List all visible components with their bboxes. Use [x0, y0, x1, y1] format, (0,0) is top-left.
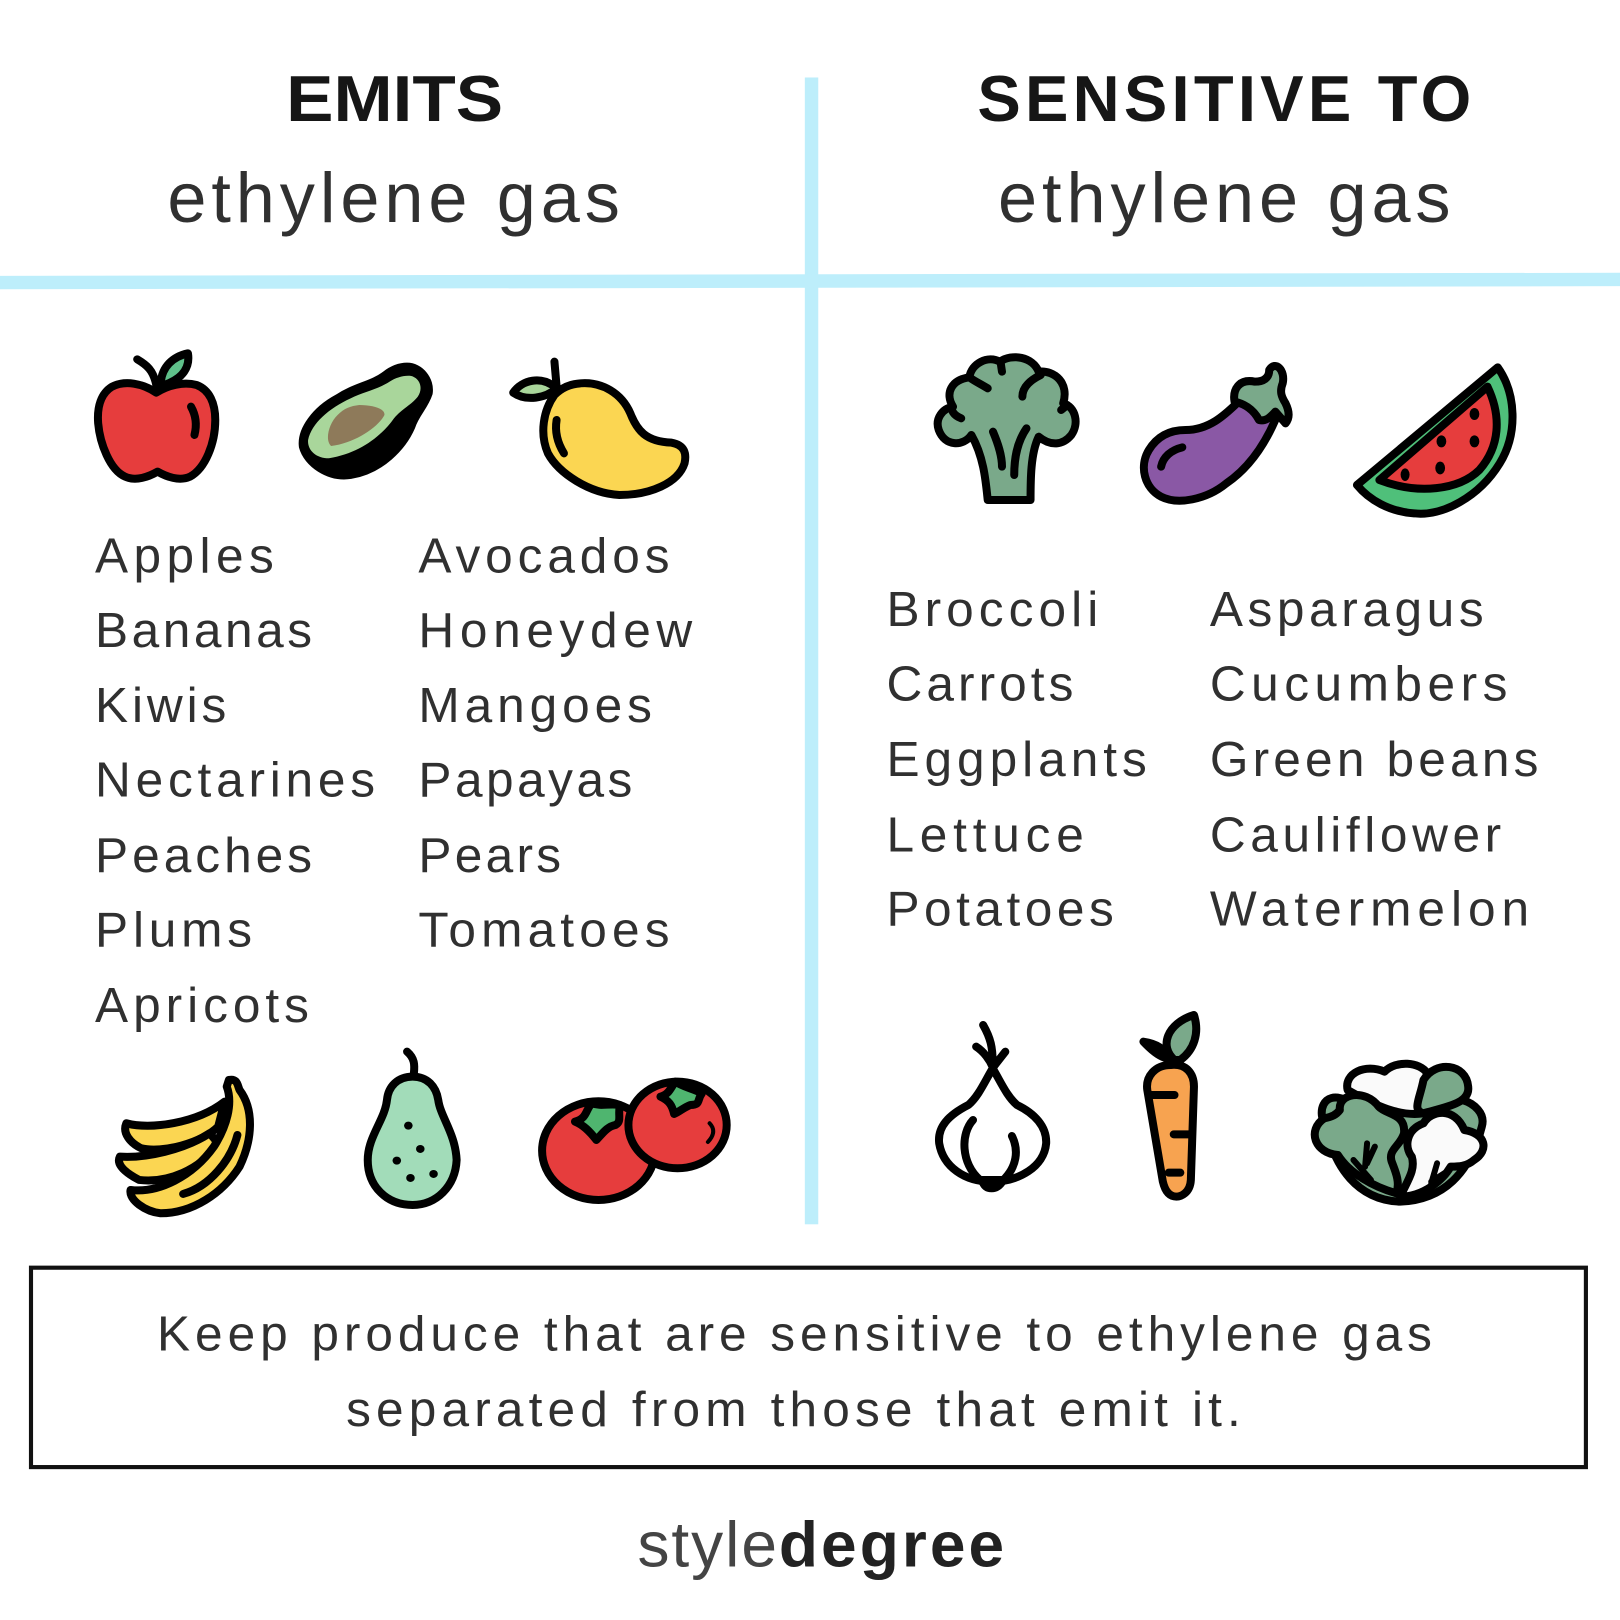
icon: apple: [98, 353, 215, 479]
icon: eggplant: [1144, 366, 1289, 501]
list: sensitive produce, second column: Green beans: [1210, 731, 1538, 787]
icon: mango: [513, 362, 685, 495]
icon: tomatoes: [542, 1082, 727, 1200]
list: emitting produce, second column: Avocados: [418, 527, 669, 583]
list: sensitive produce, first column: Eggplants: [886, 731, 1147, 787]
list: emitting produce, first column: Apricots: [95, 977, 309, 1033]
list: sensitive produce, first column: Broccoli: [886, 581, 1098, 637]
callout text: Keep produce that are sensitive to ethylene gas: [157, 1305, 1432, 1361]
list: emitting produce, first column: Plums: [95, 901, 252, 957]
list: emitting produce, second column: Papayas: [418, 752, 632, 808]
logo: styledegree: styledegree: [637, 1508, 1004, 1580]
callout box: [31, 1268, 1586, 1467]
heading: EMITS: EMITS: [286, 62, 503, 135]
subheading: ethylene gas: ethylene gas: [167, 158, 620, 237]
list: sensitive produce, first column: Potatoes: [886, 881, 1114, 937]
list: sensitive produce, first column: [886, 581, 1147, 937]
icon: watermelon: [1357, 367, 1513, 514]
list: emitting produce, second column: Tomatoes: [418, 901, 669, 957]
list: emitting produce, first column: Nectarines: [95, 752, 375, 808]
icon: cauliflower: [1315, 1064, 1484, 1202]
list: sensitive produce, first column: Carrots: [886, 655, 1073, 711]
icon: carrot: [1143, 1015, 1196, 1197]
list: emitting produce, second column: Honeydew: [418, 602, 692, 658]
list: sensitive produce, second column: Watermelon: [1210, 881, 1529, 937]
list: emitting produce, first column: Kiwis: [95, 677, 226, 733]
list: sensitive produce, second column: Cauliflower: [1210, 806, 1501, 862]
icon: onion: [939, 1025, 1046, 1188]
list: emitting produce, second column: [418, 527, 692, 957]
list: sensitive produce, second column: Cucumbers: [1210, 655, 1507, 711]
list: emitting produce, second column: Pears: [418, 827, 561, 883]
subheading: ethylene gas: ethylene gas: [998, 158, 1451, 237]
icon: broccoli: [938, 357, 1076, 500]
list: emitting produce, second column: Mangoes: [418, 677, 652, 733]
list: emitting produce, first column: Bananas: [95, 602, 312, 658]
icon: bananas: [119, 1080, 250, 1213]
list: emitting produce, first column: [95, 527, 375, 1033]
list: sensitive produce, second column: [1210, 581, 1538, 937]
icon: pear: [368, 1052, 457, 1205]
list: emitting produce, first column: Apples: [95, 527, 274, 583]
list: sensitive produce, first column: Lettuce: [886, 806, 1084, 862]
callout text: [157, 1305, 1432, 1437]
list: emitting produce, first column: Peaches: [95, 827, 312, 883]
callout text: separated from those that emit it.: [346, 1381, 1241, 1437]
heading: SENSITIVE TO: SENSITIVE TO: [977, 62, 1471, 135]
list: sensitive produce, second column: Asparagus: [1210, 581, 1484, 637]
icon: avocado: [303, 367, 429, 475]
panel: sensitive to ethylene gas: [886, 62, 1538, 1202]
panel: emits ethylene gas: [95, 62, 727, 1213]
